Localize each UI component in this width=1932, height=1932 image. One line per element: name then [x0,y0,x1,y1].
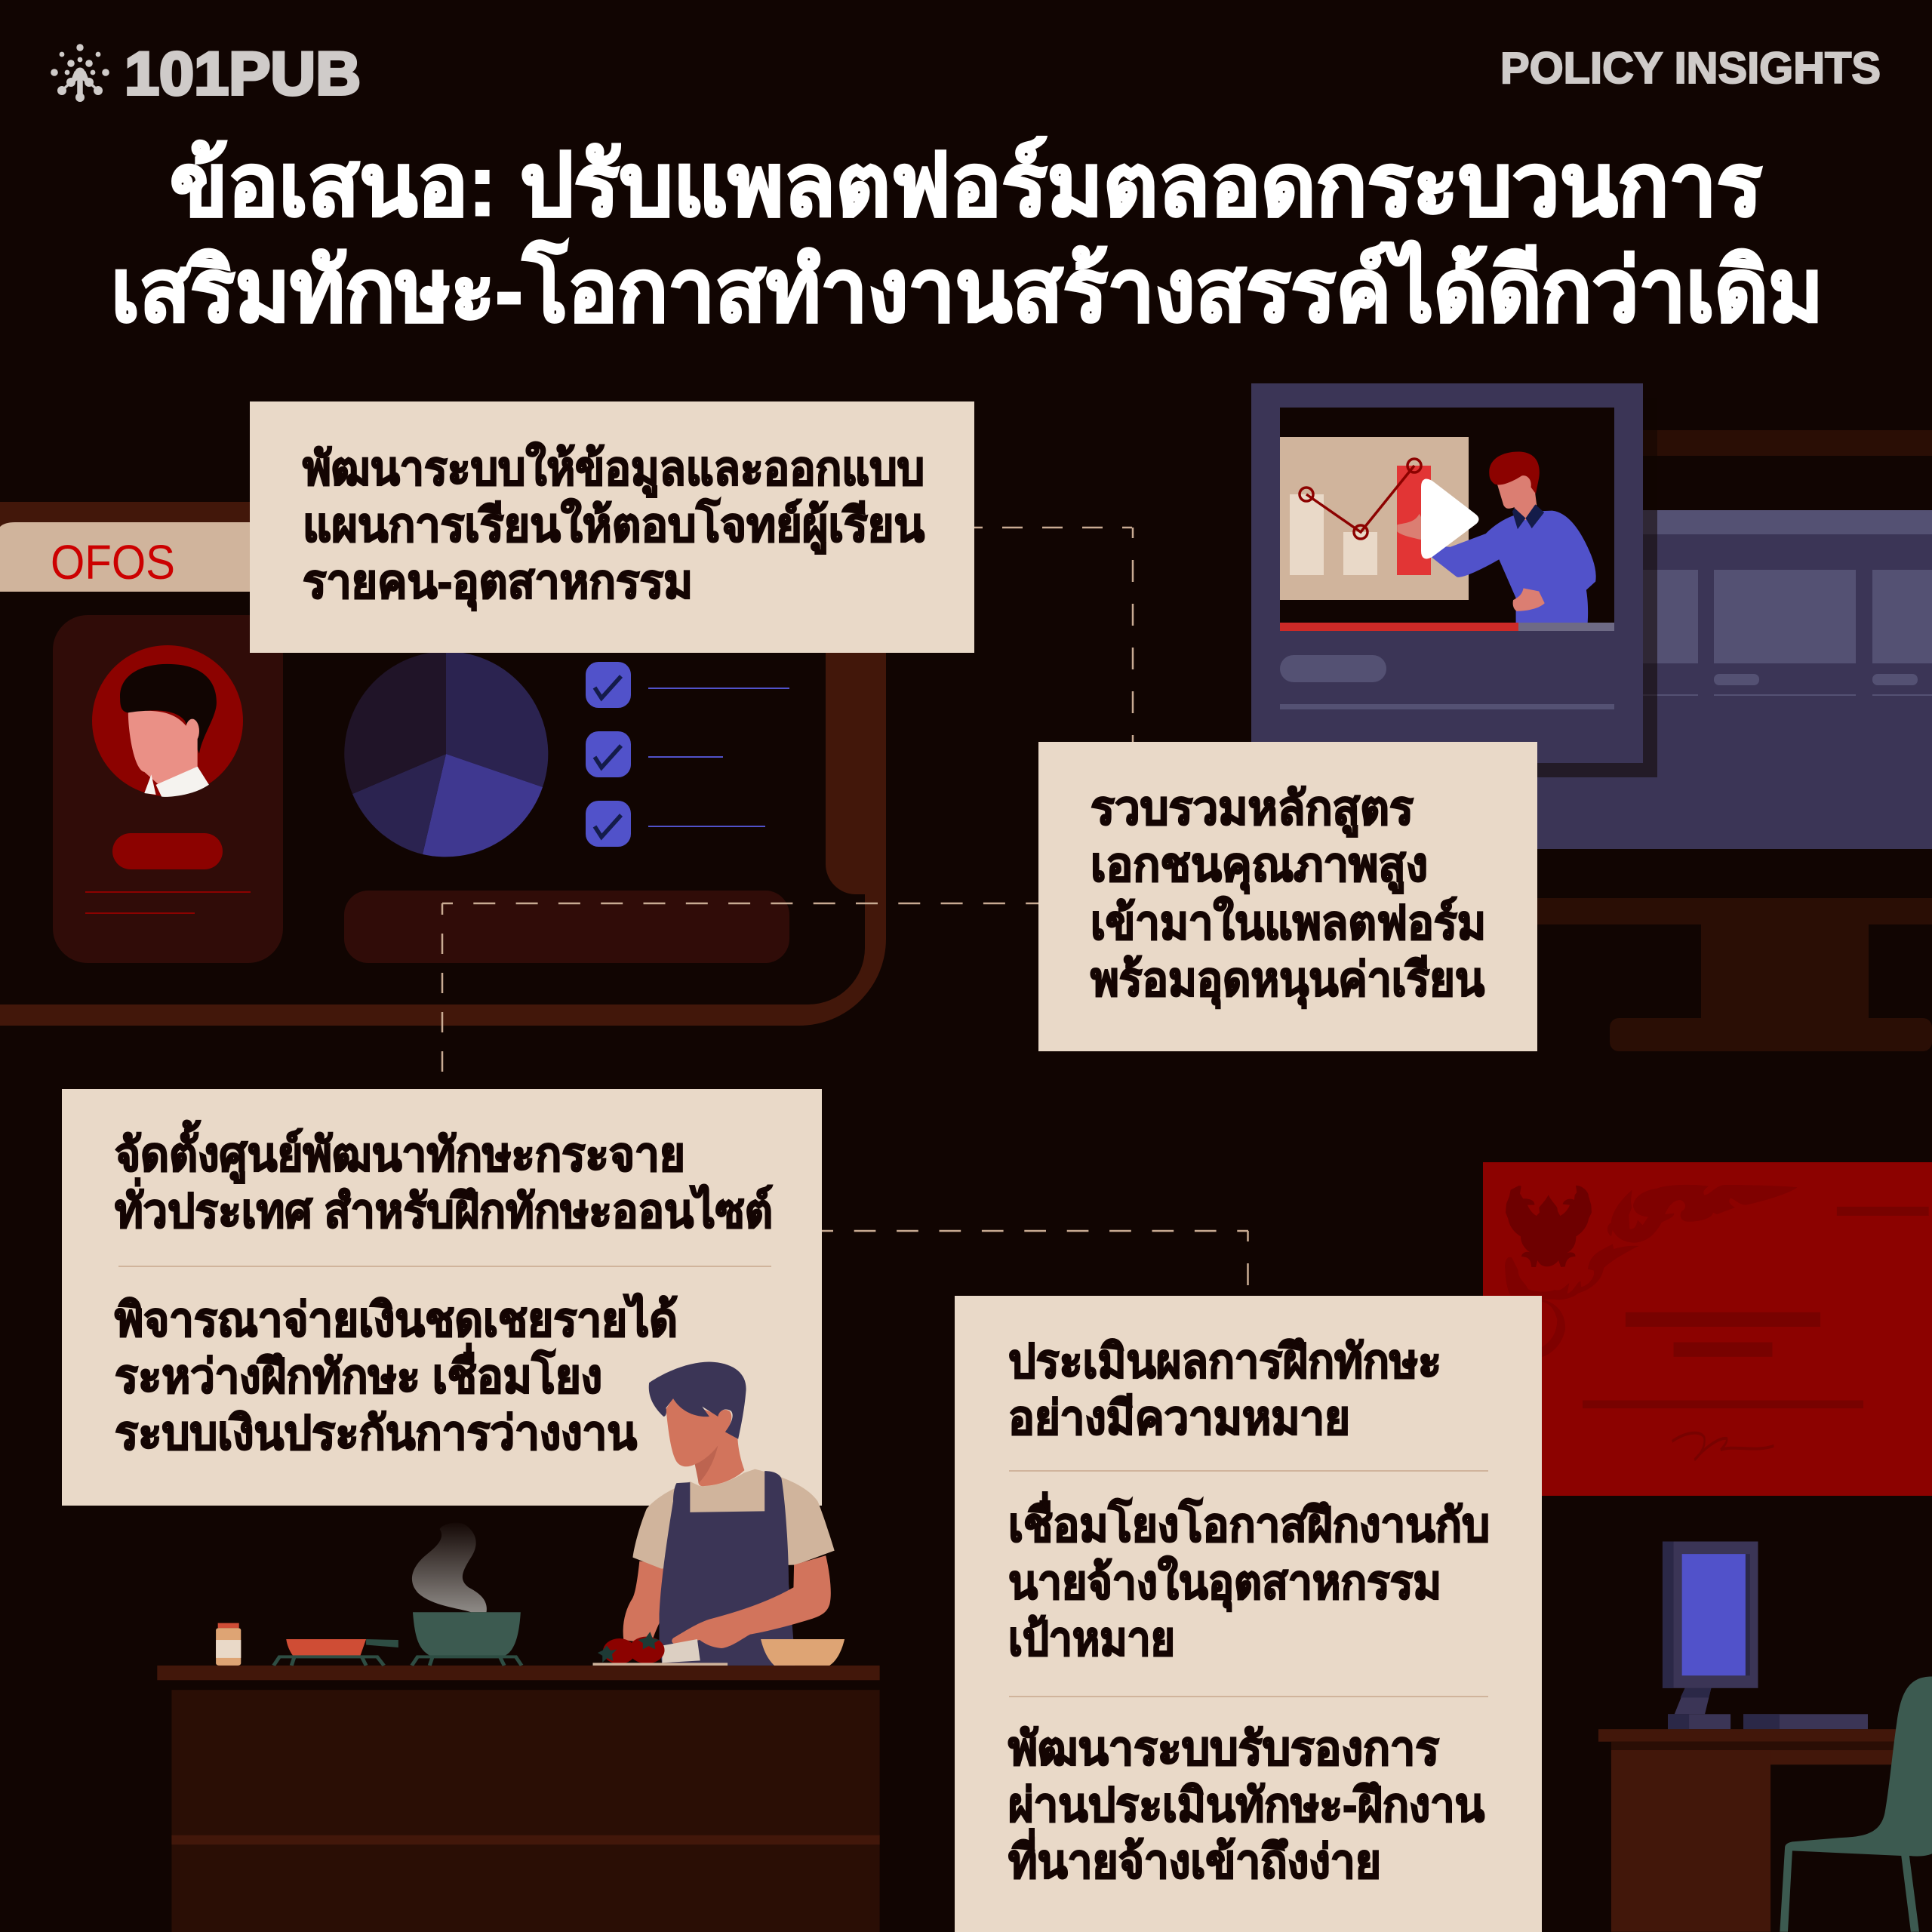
icon: play button [1423,481,1478,557]
panel: private courses [1038,742,1537,1051]
panel: personalised learning [250,401,974,653]
OFOS tab [0,522,257,592]
window shadow [1266,398,1657,777]
tv stand [1537,898,1932,1051]
label: policy insights: POLICY INSIGHTS [1500,44,1881,93]
profile card [53,615,283,963]
title: เสริมทักษะ-โอกาสทำงานสร้างสรรค์ได้ดีกว่าเดิม [111,240,1823,340]
panel: assessment and certification: เชื่อมโยงโอกาสฝึกงานกับ [1008,1492,1490,1552]
title [111,136,1823,340]
panel: training centres [62,1089,822,1506]
panel: private courses: รวบรวมหลักสูตร [1091,783,1414,837]
panel: private courses: เอกชนคุณภาพสูง [1091,839,1428,894]
panel: personalised learning: แผนการเรียนให้ตอบโจทย์ผู้เรียน [303,497,924,554]
pot on stove [412,1612,521,1666]
panel: assessment and certification: ที่นายจ้างเข้าถึงง่าย [1008,1829,1381,1888]
panel: assessment and certification: เป้าหมาย [1008,1614,1175,1666]
panel: personalised learning: พัฒนาระบบให้ข้อมูลและออกแบบ [303,441,924,497]
signature [1672,1433,1774,1460]
panel: training centres: ทั่วประเทศ สำหรับฝึกทักษะออนไซต์ [115,1178,773,1238]
checklist [586,662,789,847]
panel: assessment and certification: ผ่านประเมินทักษะ-ฝึกงาน [1008,1780,1484,1832]
flourishes [1505,1185,1798,1357]
frying pan on stove [274,1639,398,1666]
illustration: video course platform [1251,383,1932,1051]
pie chart [344,651,548,857]
desk [1598,1729,1932,1932]
steam [412,1523,487,1612]
illustration: desk with computer [1598,1542,1932,1932]
monitor [1663,1542,1758,1729]
whiteboard chart [1280,437,1469,600]
keyboard [1743,1714,1868,1729]
name pill [112,833,223,869]
main window [1251,383,1643,763]
panel: assessment and certification: ประเมินผลการฝึกทักษะ [1008,1336,1441,1388]
top shelf [1643,430,1932,456]
illustration: certificate [1483,1162,1932,1496]
certificate lines [1626,1312,1820,1327]
jar [216,1623,241,1666]
title: ข้อเสนอ: ปรับแพลตฟอร์มตลอดกระบวนการ [170,136,1762,234]
progress bar [1280,623,1518,631]
thumbnails [1585,570,1932,696]
panel: private courses: เข้ามาในแพลตฟอร์ม [1091,896,1486,949]
panel: assessment and certification [955,1296,1542,1932]
avatar [92,645,243,797]
cutting board [593,1663,728,1666]
panel: assessment and certification: อย่างมีความหมาย [1008,1392,1350,1444]
dashed connector: card 2 to card 3 [442,903,1038,1072]
dashed connector: card 1 to card 2 [974,528,1133,742]
chair [1780,1677,1932,1932]
panel: training centres: ระบบเงินประกันการว่างงาน [115,1407,637,1460]
counter [157,1666,880,1932]
back panel [1434,510,1932,849]
screen [1280,408,1614,623]
illustration: OFOS learning platform [0,502,886,1026]
panel: training centres: ระหว่างฝึกทักษะ เชื่อมโยง [115,1343,602,1403]
icon: network burst [51,44,109,102]
logo: 101PUB [51,40,361,108]
lower bar [344,891,789,963]
panel: training centres: พิจารณาจ่ายเงินชดเชยรายได้ [115,1293,678,1346]
window controls [1280,655,1386,682]
platform frame [0,502,886,1026]
garuda emblem [1506,1186,1592,1267]
wordmark: 101PUB [125,40,361,108]
cook [598,1362,835,1666]
illustration: kitchen with cook [157,1362,880,1932]
panel: assessment and certification: นายจ้างในอุตสาหกรรม [1008,1555,1441,1611]
panel: training centres: จัดตั้งศูนย์พัฒนาทักษะกระจาย [115,1120,685,1183]
panel: private courses: พร้อมอุดหนุนค่าเรียน [1091,954,1484,1008]
OFOS wordmark: OFOS [51,535,175,589]
bowl [761,1639,844,1666]
dashed connector: card 3 to card 4 [822,1231,1248,1286]
panel: personalised learning: รายคน-อุตสาหกรรม [303,556,693,611]
panel: assessment and certification: พัฒนาระบบรับรองการ [1008,1723,1439,1775]
presenter [1397,451,1596,623]
